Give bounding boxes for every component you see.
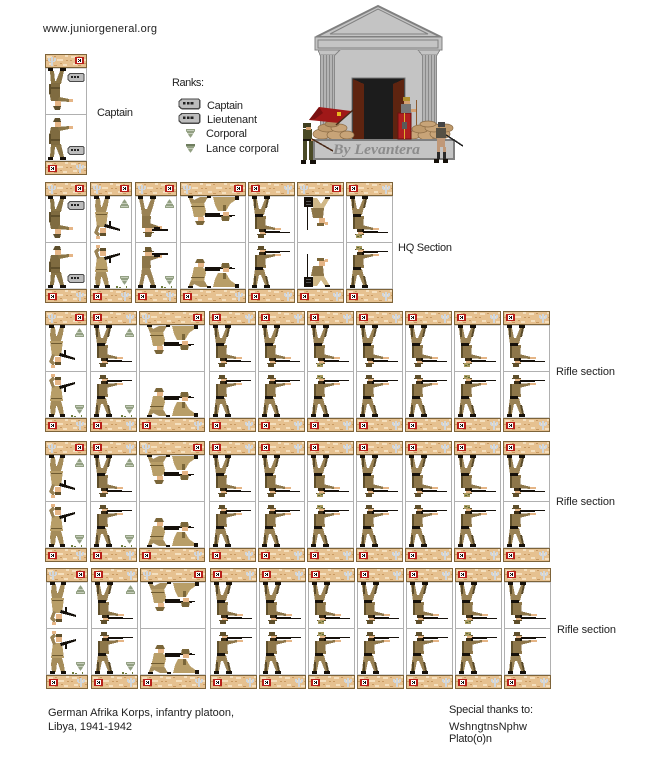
card: rifleman: [455, 568, 502, 688]
card: rifleman: [503, 312, 550, 432]
label: rifle section 1: Rifle section: [556, 366, 615, 378]
card: rifleman: [259, 568, 306, 688]
column right: [418, 50, 440, 140]
card: machine gun team: [139, 312, 205, 432]
card: radio operator: [297, 182, 344, 302]
panel: hq section: [45, 182, 393, 302]
temple wall: [335, 50, 422, 140]
column left: [318, 50, 340, 140]
card: lance corporal: [90, 442, 137, 562]
credits: WshngtnsNphw: [449, 721, 527, 733]
panel: rifle section 3: [46, 568, 551, 688]
card: nco with smg raised: [90, 182, 132, 302]
card: rifleman: [356, 312, 403, 432]
label: captain: Captain: [97, 107, 133, 119]
temple base: [314, 140, 454, 159]
card: nco: [45, 442, 87, 562]
card: machine gun team: [139, 442, 205, 562]
credits: [449, 704, 533, 745]
card: rifleman: [454, 442, 501, 562]
credits: Special thanks to:: [449, 704, 533, 716]
legend heading: Ranks:: [172, 77, 204, 89]
roman soldier: [398, 97, 417, 139]
rank: corporal: Corporal: [206, 128, 247, 140]
card: nco: [45, 312, 87, 432]
card: machine gun team: [180, 182, 246, 302]
card: rifleman: [405, 442, 452, 562]
signature: By Levantera: [332, 142, 421, 158]
caption: Libya, 1941-1942: [48, 721, 132, 733]
card: rifleman: [307, 312, 354, 432]
temple entablature: [315, 37, 442, 50]
card: rifleman: [308, 568, 355, 688]
card: officer: [45, 182, 87, 302]
red flag: [309, 107, 353, 125]
card: rifleman: [504, 568, 551, 688]
card: captain: [45, 54, 87, 174]
card: nco: [46, 568, 88, 688]
rank: lieutenant: Lieutenant: [207, 114, 257, 126]
card: rifleman: [210, 568, 257, 688]
card: rifleman: [357, 568, 404, 688]
card: rifleman: [209, 312, 256, 432]
caption: German Afrika Korps, infantry platoon,: [48, 707, 234, 719]
rank: captain: Captain: [207, 100, 243, 112]
soldier right: [434, 122, 463, 163]
logo: temple by Levantera: [301, 6, 463, 164]
caption: [48, 707, 234, 733]
rank: lance corporal: Lance corporal: [206, 143, 279, 155]
card: lance corporal: [90, 312, 137, 432]
website url: www.juniorgeneral.org: [42, 23, 157, 35]
card: rifleman: [248, 182, 295, 302]
card: rifleman: [406, 568, 453, 688]
label: hq section: HQ Section: [398, 242, 452, 254]
panel: rifle section 1: [45, 312, 550, 432]
soldier left: [301, 123, 333, 164]
card: rifleman: [356, 442, 403, 562]
card: rifleman: [503, 442, 550, 562]
card: rifleman: [258, 442, 305, 562]
card: rifleman: [307, 442, 354, 562]
panel: rifle section 2: [45, 442, 550, 562]
card: nco with smg: [135, 182, 177, 302]
card: rifleman: [346, 182, 393, 302]
card: rifleman: [209, 442, 256, 562]
card: rifleman: [405, 312, 452, 432]
temple door: [352, 78, 405, 140]
card: machine gun team: [140, 568, 206, 688]
sandbags: [313, 121, 453, 140]
legend: ranks: [172, 77, 279, 155]
card: lance corporal: [91, 568, 138, 688]
card: rifleman: [454, 312, 501, 432]
label: rifle section 3: Rifle section: [557, 624, 616, 636]
credits: Plato(o)n: [449, 733, 492, 745]
label: rifle section 2: Rifle section: [556, 496, 615, 508]
card: rifleman: [258, 312, 305, 432]
temple roof: [316, 6, 441, 37]
